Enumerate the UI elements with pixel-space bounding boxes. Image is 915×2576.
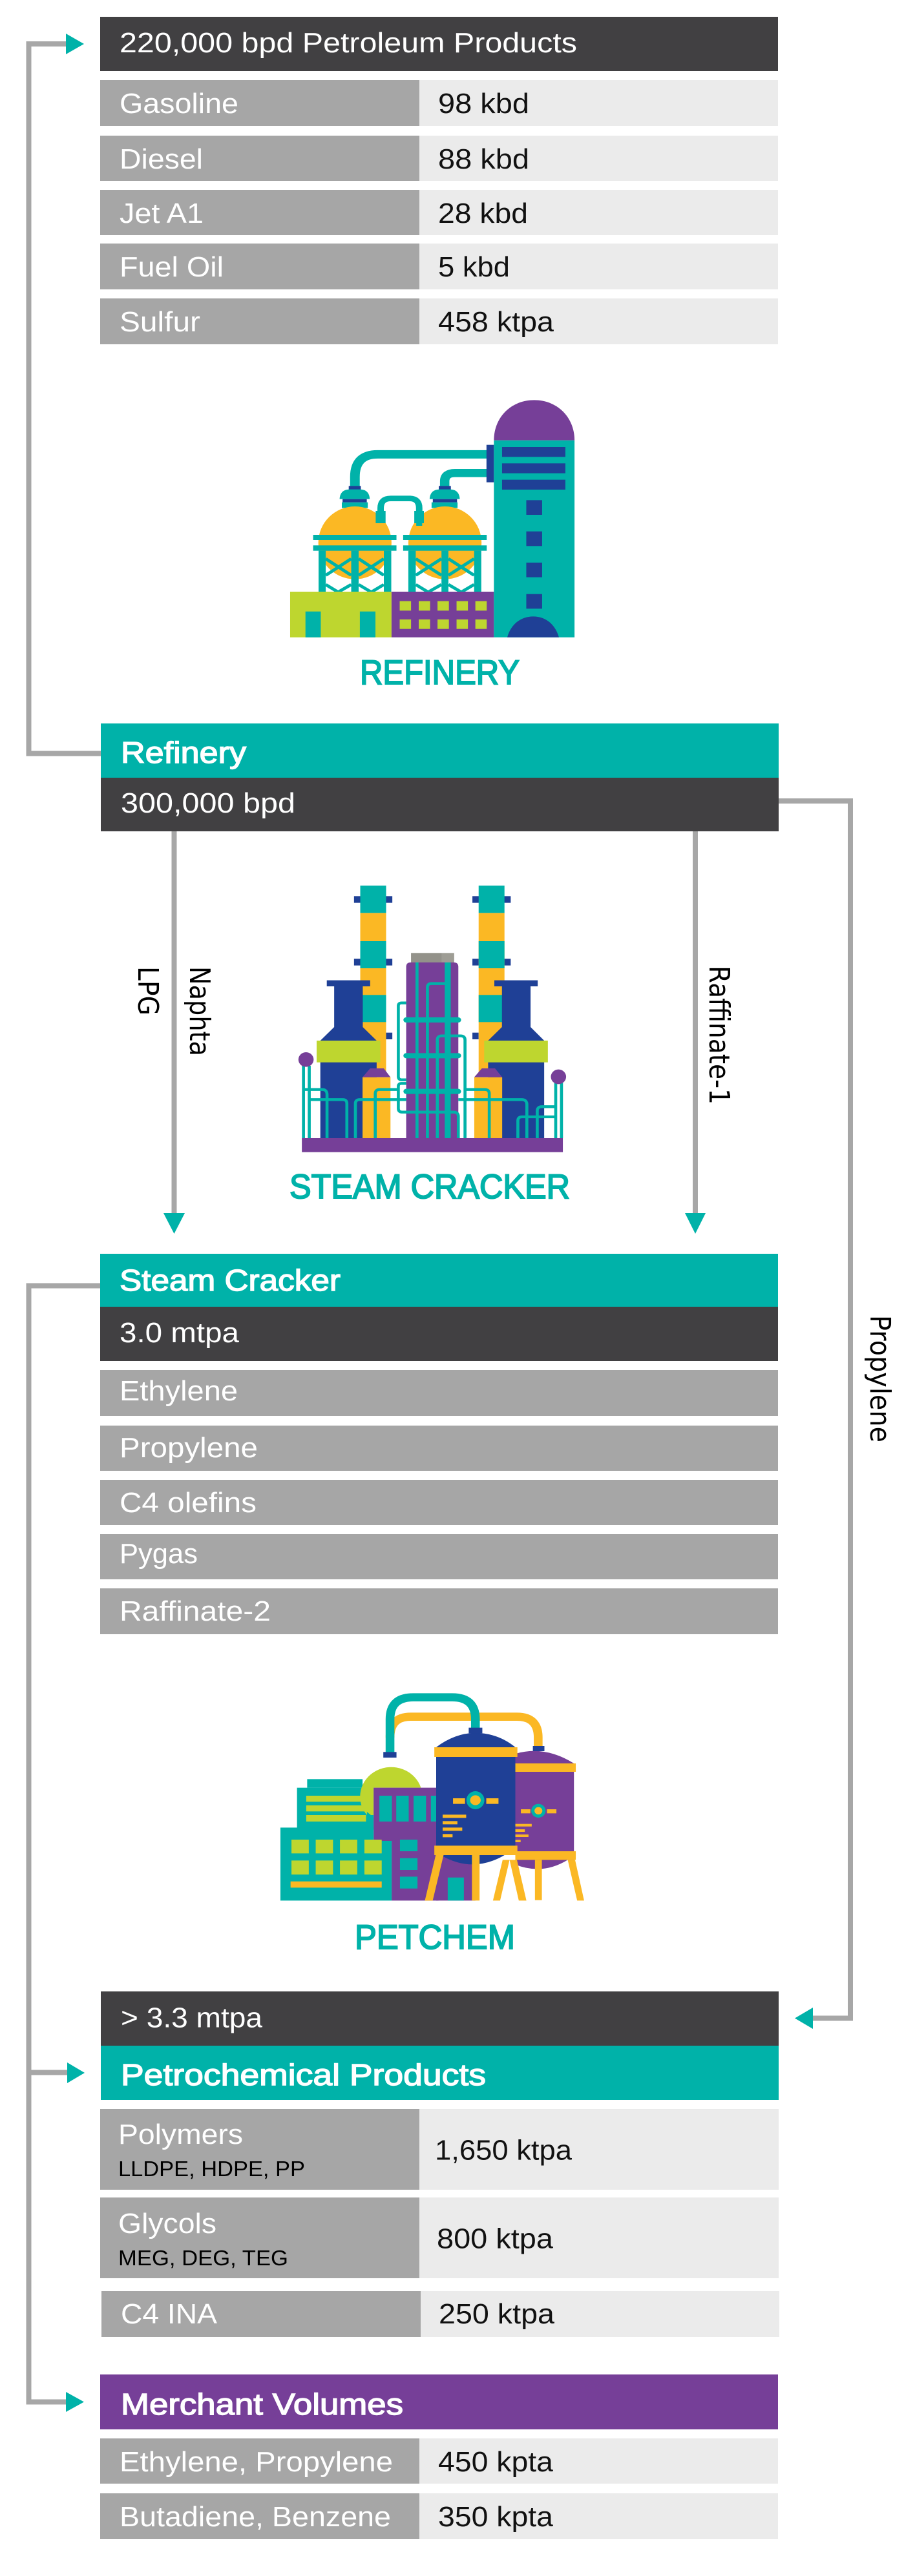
bar: refinery capacity: 300,000 bpd — [121, 787, 295, 819]
row: propylene — [100, 1426, 778, 1471]
row: diesel: Diesel — [120, 143, 203, 175]
bar: petrochemical products title — [101, 2046, 779, 2100]
panel: petroleum products — [100, 17, 778, 344]
row: C4 INA: C4 INA — [121, 2298, 218, 2330]
row: C4 INA: 250 ktpa — [439, 2298, 555, 2330]
heading: 220,000 bpd petroleum products: 220,000 bpd Petroleum Products — [120, 27, 577, 59]
row: raffinate-2: Raffinate-2 — [120, 1595, 271, 1627]
row: jet A1: 28 kbd — [438, 198, 528, 229]
icon: petchem — [280, 1698, 584, 1900]
arrow: LPG and naphtha to steam cracker — [163, 831, 185, 1234]
row: ethylene, propylene — [100, 2438, 778, 2484]
heading: STEAM CRACKER: STEAM CRACKER — [289, 1168, 570, 1206]
heading: REFINERY: REFINERY — [360, 654, 520, 692]
row: gasoline — [100, 80, 778, 126]
row: polymers: 1,650 ktpa — [435, 2134, 573, 2166]
row: glycols: Glycols — [118, 2208, 216, 2239]
row: diesel — [100, 136, 778, 181]
row: gasoline: Gasoline — [120, 88, 238, 119]
row: sulfur: 458 ktpa — [438, 306, 554, 338]
row: fuel oil — [100, 244, 778, 289]
row: jet A1: Jet A1 — [120, 198, 204, 229]
row: pygas — [100, 1534, 778, 1579]
row: C4 olefins: C4 olefins — [120, 1487, 257, 1519]
arrow: refinery to petroleum products — [28, 34, 101, 753]
bar: steam cracker capacity — [100, 1307, 778, 1361]
row: glycols: 800 ktpa — [437, 2223, 554, 2254]
bar: steam cracker capacity: 3.0 mtpa — [120, 1317, 240, 1349]
row: glycols: MEG, DEG, TEG — [118, 2246, 288, 2270]
row: polymers: Polymers — [118, 2119, 243, 2150]
panel: steam cracker — [100, 1254, 778, 1634]
row: sulfur: Sulfur — [120, 306, 200, 338]
arrow: steam cracker to petrochemical products and merchant volumes — [28, 1285, 101, 2412]
panel: petrochemical products — [100, 1991, 779, 2337]
icon: refinery — [290, 400, 574, 638]
panel: merchant volumes — [100, 2374, 778, 2539]
label: Naphta: Naphta — [183, 966, 216, 1056]
arrow: propylene from refinery to petrochemicals — [779, 801, 850, 2029]
bar: petrochemical capacity: > 3.3 mtpa — [121, 2002, 263, 2033]
heading: 220,000 bpd petroleum products — [100, 17, 778, 71]
row: butadiene, benzene: Butadiene, Benzene — [120, 2501, 391, 2533]
row: jet A1 — [100, 190, 778, 235]
arrow: raffinate-1 to steam cracker — [685, 831, 706, 1234]
row: polymers: LLDPE, HDPE, PP — [118, 2157, 305, 2181]
row: butadiene, benzene: 350 kpta — [438, 2501, 554, 2533]
row: sulfur — [100, 298, 778, 344]
bar: steam cracker title — [100, 1254, 778, 1307]
bar: merchant volumes title: Merchant Volumes — [121, 2387, 403, 2421]
row: raffinate-2 — [100, 1588, 778, 1634]
row: diesel: 88 kbd — [438, 143, 529, 175]
label: LPG: LPG — [131, 966, 164, 1015]
row: fuel oil: 5 kbd — [438, 251, 510, 283]
heading: PETCHEM: PETCHEM — [355, 1918, 515, 1957]
bar: refinery title: Refinery — [121, 736, 246, 769]
row: C4 olefins — [100, 1480, 778, 1525]
row: ethylene — [100, 1370, 778, 1416]
label: Raffinate-1: Raffinate-1 — [702, 966, 735, 1105]
bar: steam cracker title: Steam Cracker — [120, 1263, 341, 1297]
row: butadiene, benzene — [100, 2493, 778, 2539]
icon: steam cracker — [299, 886, 566, 1152]
row: propylene: Propylene — [120, 1432, 258, 1464]
row: glycols — [100, 2197, 779, 2278]
panel: refinery — [101, 723, 779, 831]
label: Propylene: Propylene — [863, 1315, 896, 1442]
bar: refinery title — [101, 723, 779, 778]
bar: merchant volumes title — [100, 2374, 778, 2429]
row: gasoline: 98 kbd — [438, 88, 529, 119]
row: polymers — [100, 2109, 779, 2190]
row: ethylene: Ethylene — [120, 1375, 238, 1407]
row: fuel oil: Fuel Oil — [120, 251, 224, 283]
row: ethylene, propylene: Ethylene, Propylene — [120, 2446, 393, 2478]
bar: petrochemical products title: Petrochemical Products — [121, 2058, 486, 2092]
bar: refinery capacity — [101, 778, 779, 831]
bar: petrochemical capacity — [101, 1991, 779, 2046]
row: ethylene, propylene: 450 kpta — [438, 2446, 554, 2478]
row: pygas: Pygas — [120, 1538, 198, 1570]
row: C4 INA — [101, 2291, 779, 2337]
